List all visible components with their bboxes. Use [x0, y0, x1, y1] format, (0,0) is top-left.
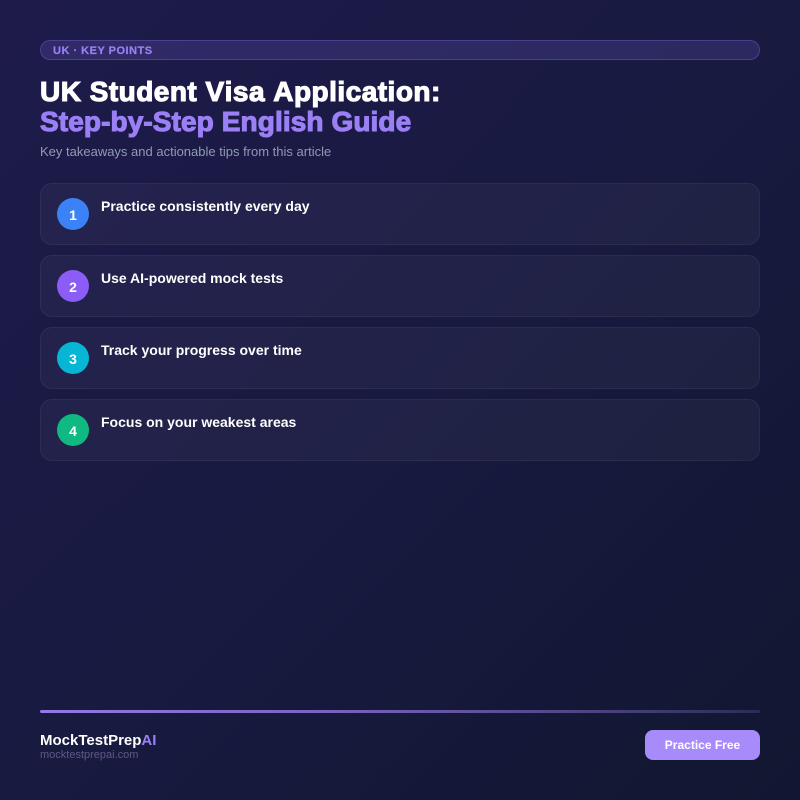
number badge 4: 4	[69, 423, 77, 439]
panel: key point 3	[40, 327, 760, 389]
point text 4: Focus on your weakest areas	[101, 414, 296, 430]
number badge 4	[57, 414, 89, 446]
title: UK Student Visa Application:	[40, 76, 441, 106]
subtitle: Key takeaways and actionable tips from this article	[40, 144, 331, 159]
call to action button: Practice Free	[665, 738, 740, 752]
number badge 3	[57, 342, 89, 374]
point text 3: Track your progress over time	[101, 342, 302, 358]
panel: key point 1	[40, 183, 760, 245]
panel: key point 4	[40, 399, 760, 461]
title	[40, 76, 441, 138]
number badge 1	[57, 198, 89, 230]
number badge 2: 2	[69, 279, 77, 295]
number badge 3: 3	[69, 351, 77, 367]
gradient divider bar	[40, 710, 760, 713]
panel: key point 2	[40, 255, 760, 317]
number badge 2	[57, 270, 89, 302]
number badge 1: 1	[69, 207, 77, 223]
brand name: MockTestPrepAI	[40, 732, 156, 749]
call to action button	[645, 730, 760, 760]
point text 1: Practice consistently every day	[101, 198, 310, 214]
tag pill: UK key points: UK · KEY POINTS	[53, 45, 153, 57]
brand URL: mocktestprepai.com	[40, 749, 138, 761]
title: Step-by-Step English Guide	[40, 106, 411, 137]
point text 2: Use AI-powered mock tests	[101, 270, 283, 286]
tag pill: UK key points	[40, 40, 760, 60]
